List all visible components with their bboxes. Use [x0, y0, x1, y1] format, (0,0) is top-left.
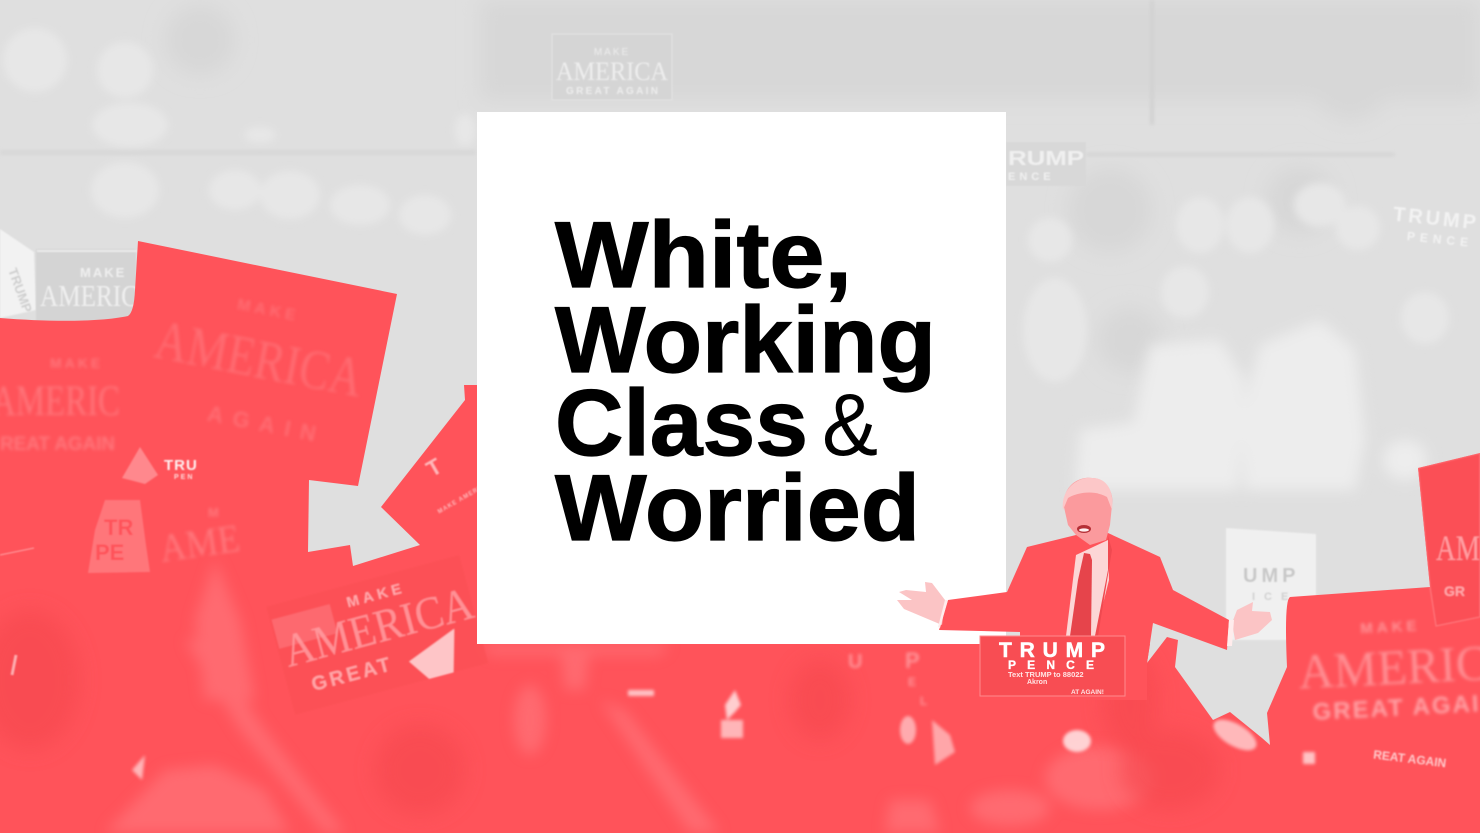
right cuff — [1227, 620, 1234, 646]
speaker hair — [1063, 478, 1112, 510]
sign: trump pence, far right: PENCE — [1406, 229, 1474, 250]
title: White, Working Class & Worried: Class — [555, 370, 808, 475]
sign: make america, centre red fragment — [163, 508, 240, 562]
lighter streaks: blurred audience foreground — [105, 560, 1155, 833]
sign: trump pence small, centre left: TRU — [164, 457, 198, 474]
sign: make america great again, lower right: GREAT AGAI — [1312, 690, 1480, 726]
speaker tie — [1070, 553, 1092, 636]
sign: make america great, lower left: MAKE — [345, 579, 407, 611]
sign: trump pence small, centre left: TR — [104, 515, 133, 540]
sign: make america great again, top centre — [552, 34, 672, 100]
sign: make america great again, top centre: AMERICA — [556, 57, 668, 86]
sign: tilted red flag beside panel: T — [422, 453, 447, 482]
sign: trump pence, far right — [1390, 204, 1480, 250]
speaker mouth — [1077, 525, 1091, 533]
title: White, Working Class & Worried: White, — [555, 202, 852, 307]
sign: trump pence, upper right: ENCE — [1008, 171, 1055, 183]
sign: make america great again, top centre: GREAT AGAIN — [566, 86, 658, 97]
sign: trump pence, upper right: RUMP — [1008, 148, 1084, 170]
sign: make america great again, lower right — [1300, 619, 1480, 722]
sign: pale trump placard beside speaker — [1226, 528, 1316, 640]
sign: make america, centre red fragment: AME — [157, 515, 242, 571]
title: White, Working Class & Worried — [555, 202, 936, 560]
sign: make america, left grey — [36, 249, 138, 321]
letters seen below panel: E — [908, 675, 916, 689]
speaker head — [1064, 478, 1112, 545]
sign: tilted red flag beside panel: MAKE AMERICA — [437, 481, 491, 516]
sign: make america great again, top centre: MAKE — [594, 47, 630, 58]
left hand — [897, 582, 945, 625]
sign: make america great, lower left: GREAT — [309, 653, 396, 696]
sign: tilted red flag beside panel — [424, 457, 477, 514]
sign: make america, large tilted: AMERICA — [150, 309, 368, 410]
sign: make america great, lower left: AMERICA — [278, 577, 479, 678]
campaign podium sign: Akron — [1027, 679, 1047, 686]
sign: make america, left grey: AMERIC — [40, 278, 138, 313]
campaign podium sign: PENCE — [1008, 658, 1094, 672]
sign: make america great, lower left — [272, 583, 476, 690]
title: White, Working Class & Worried: Working — [555, 287, 936, 392]
letters seen below panel: U — [848, 651, 862, 673]
sign: trump pence, far right: TRUMP — [1392, 204, 1480, 234]
sign: small great america, bottom right: REAT AGAIN — [1373, 748, 1447, 770]
sign: make america, centre red fragment: M — [208, 505, 219, 520]
sign: make america great again, lower right: MAKE — [1360, 617, 1421, 637]
title: White, Working Class & Worried: Worried — [555, 455, 920, 560]
sign: trump pence, upper right — [1006, 142, 1086, 186]
speaker lapel — [1095, 536, 1112, 636]
sign: white placard, left — [0, 229, 36, 318]
sign: trump pence small, centre left: PEN — [174, 474, 194, 481]
sign: pale trump placard beside speaker: ICE — [1252, 591, 1297, 603]
sign: make america, left grey: MAKE — [80, 265, 126, 280]
sign: make america, large tilted — [154, 299, 357, 441]
campaign podium sign: AT AGAIN! — [1071, 689, 1104, 696]
sign: trump pence small, centre left — [88, 447, 198, 573]
campaign podium sign: TRUMP — [999, 639, 1105, 662]
title: White, Working Class & Worried: & — [822, 375, 878, 474]
sign: make america, left red — [0, 355, 120, 455]
sign: make america, large tilted: AGAIN — [205, 401, 318, 446]
red duotone crowd and signs — [0, 241, 1480, 833]
figure: speaker at podium — [897, 478, 1272, 700]
left cuff — [938, 600, 948, 628]
campaign podium sign: Text TRUMP to 88022 — [1008, 670, 1084, 679]
sign: make america, large tilted: MAKE — [236, 296, 301, 325]
sign: make america, left red: REAT AGAIN — [0, 434, 115, 455]
sign: make america, left red: MAKE — [50, 355, 103, 371]
speaker suit — [939, 533, 1229, 700]
letters seen below panel: P — [905, 648, 920, 673]
right hand — [1232, 602, 1272, 640]
speaker shirt — [1066, 540, 1109, 636]
sign: trump pence small, centre left: PE — [95, 540, 124, 565]
sign: white placard, left: TRUMP — [5, 266, 35, 315]
letters seen below panel: L — [920, 694, 927, 708]
white title panel — [477, 112, 1006, 644]
sign: upper right red: GR — [1444, 583, 1465, 599]
sign: pale trump placard beside speaker: UMP — [1243, 565, 1299, 587]
letters seen below panel — [132, 648, 1315, 780]
campaign podium sign — [980, 636, 1125, 696]
sign: fragments at far left — [0, 548, 34, 675]
sign: upper right red — [1418, 453, 1480, 626]
